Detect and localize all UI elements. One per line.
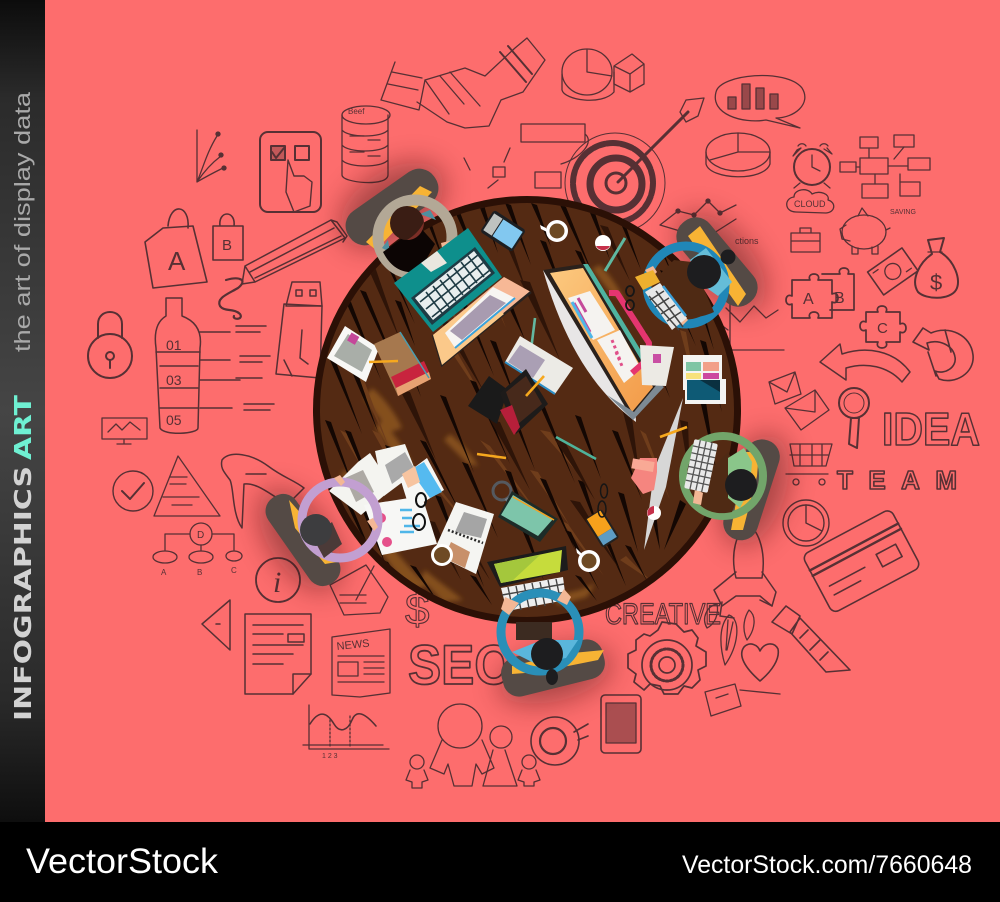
glasses right xyxy=(598,484,608,517)
spike base xyxy=(631,458,657,494)
laptop top left xyxy=(394,228,531,365)
keys xyxy=(415,251,491,320)
torso ring xyxy=(683,436,763,516)
keyboard top right xyxy=(635,270,687,330)
phone orange xyxy=(585,509,620,548)
torso ring xyxy=(647,246,725,324)
hair accent xyxy=(407,222,424,240)
icon: target and arrow xyxy=(565,98,704,233)
icon: gear xyxy=(628,622,706,694)
black tablet cluster xyxy=(468,369,548,435)
mug bottom right xyxy=(576,548,600,572)
paper under monitor xyxy=(640,345,674,386)
green pencil xyxy=(556,437,596,459)
magnifier xyxy=(493,482,517,516)
icon: org tree: D xyxy=(197,530,204,541)
ring interior xyxy=(652,260,714,318)
person: bottom left xyxy=(259,475,378,592)
pencil top xyxy=(605,238,625,271)
icon: shopping bags: A xyxy=(168,246,186,276)
icon: necktie xyxy=(772,606,850,672)
screen lid xyxy=(433,277,531,365)
icon: shopping cart xyxy=(786,444,832,485)
page two dots xyxy=(612,340,622,366)
head xyxy=(725,469,757,501)
person: bottom xyxy=(498,589,608,700)
notebook peach band xyxy=(396,372,431,396)
icon: info circle: i xyxy=(273,566,281,599)
icon: padlock xyxy=(88,312,132,378)
head xyxy=(300,514,332,546)
screen edge xyxy=(433,292,531,365)
icon: growth curves xyxy=(197,130,226,182)
black grain streaks xyxy=(325,203,722,605)
hands xyxy=(417,240,454,277)
icon: org tree: A xyxy=(161,568,167,577)
notebook red band xyxy=(391,361,429,388)
icon: puzzle pieces: C xyxy=(877,320,888,337)
coffee mug top xyxy=(540,220,568,242)
icon: puzzle pieces: B xyxy=(834,290,845,307)
phone screen xyxy=(493,219,523,249)
pencil right xyxy=(660,427,687,437)
chair xyxy=(669,210,765,314)
chair xyxy=(339,162,445,252)
keyboard right xyxy=(684,439,718,493)
light wood patches xyxy=(341,265,624,605)
green screen xyxy=(494,550,562,583)
hair tail xyxy=(546,669,558,685)
icon: alarm clock xyxy=(793,144,832,188)
seat cushion xyxy=(688,226,746,306)
icon: pencil scribble xyxy=(219,220,347,319)
chair xyxy=(498,636,608,700)
word: IDEA: IDEA xyxy=(882,403,980,455)
arms xyxy=(693,442,714,505)
pink cable xyxy=(609,293,649,373)
icon: line chart xyxy=(303,705,389,760)
open booklet center xyxy=(505,336,573,394)
icon: cycle arrow xyxy=(913,328,973,381)
chair xyxy=(719,435,784,545)
right monitor spike xyxy=(631,398,683,550)
monitor base xyxy=(607,383,664,420)
person: top right xyxy=(645,210,765,326)
chair xyxy=(259,488,347,592)
icon: wallet and pen xyxy=(705,684,780,716)
glasses bottom left xyxy=(413,493,426,530)
laptop bottom xyxy=(487,546,568,611)
icon: flow boxes xyxy=(464,124,588,188)
pie marker top xyxy=(595,235,611,251)
icon: pyramid xyxy=(154,456,220,516)
icon: puzzle pieces xyxy=(786,268,906,348)
monitor teal edge xyxy=(583,264,662,388)
page two xyxy=(597,330,641,383)
icon: rocket xyxy=(714,524,776,618)
icon: cloud: CLOUD xyxy=(794,199,826,209)
icon: org tree: C xyxy=(231,566,237,575)
icon: tablet sketch xyxy=(601,695,641,753)
shirt xyxy=(312,522,342,558)
color swatch page xyxy=(683,355,722,390)
pie marker right xyxy=(647,506,661,520)
seat cushion xyxy=(731,452,759,530)
keypad xyxy=(635,270,660,290)
page one blue bar xyxy=(572,302,592,338)
medium wood streaks xyxy=(340,286,690,578)
torso ring xyxy=(302,482,378,558)
icon: touch tablet xyxy=(260,132,321,212)
icon: cloud xyxy=(787,190,834,213)
icon: flow chart cluster xyxy=(840,135,930,198)
screen page xyxy=(445,287,515,348)
icon: magnifier xyxy=(839,388,869,448)
hands xyxy=(645,266,688,326)
notebook bottom spiral xyxy=(433,502,494,574)
icon: document xyxy=(245,614,311,694)
left page xyxy=(327,326,379,382)
icon: money bag: $ xyxy=(930,270,942,295)
icon: pie chart right xyxy=(706,133,770,177)
icon: handshake xyxy=(381,38,545,128)
icon: speech bubble with bars xyxy=(715,76,805,128)
icon: line chart: 1 2 3 xyxy=(322,753,338,760)
icon: newspaper xyxy=(332,629,390,697)
sidebar accent word: ART xyxy=(11,395,37,460)
icon: presentation board xyxy=(102,418,147,444)
icon: coffee cup xyxy=(531,717,588,765)
icon: 3D pie chart xyxy=(562,49,644,100)
icon: family xyxy=(406,704,540,788)
icon: bottle: 01 xyxy=(166,337,182,353)
laptop base xyxy=(394,228,502,332)
word: SEO: SEO xyxy=(408,633,513,696)
keyboard xyxy=(411,247,495,325)
icon: triangle play xyxy=(202,600,230,650)
icon: credit card xyxy=(802,509,921,614)
icon: check badge xyxy=(113,471,153,511)
icon: dollar sign: $ xyxy=(405,585,429,634)
icon: piggy bank xyxy=(840,208,916,254)
laptop keyboard xyxy=(501,577,566,611)
head xyxy=(687,255,721,289)
icon: bottle: 03 xyxy=(166,372,182,388)
monitor screen xyxy=(550,268,653,412)
notebook left xyxy=(369,332,431,396)
pen top table xyxy=(531,318,535,350)
phone top xyxy=(480,210,526,252)
teal tablet xyxy=(498,491,558,542)
icon: shopping bags: B xyxy=(222,237,232,254)
icon: line graph right: ctions xyxy=(735,236,759,246)
icon: info circle xyxy=(256,558,300,602)
icon: bottle: 05 xyxy=(166,412,182,428)
icon: zigzag chart xyxy=(720,300,784,350)
icon: banknote xyxy=(868,248,918,295)
icon: org tree: B xyxy=(197,568,202,577)
icon: piggy bank: SAVING xyxy=(890,209,916,216)
hair bun xyxy=(720,250,736,264)
icon: envelopes xyxy=(769,372,829,430)
word: TEAM: TEAM xyxy=(837,465,957,495)
watermark url: VectorStock.com/7660648 xyxy=(682,851,972,879)
seat cushion xyxy=(289,500,337,564)
paper under hand xyxy=(421,251,447,272)
icon: high heel xyxy=(221,454,304,528)
icon: org tree xyxy=(153,523,242,577)
hands xyxy=(501,589,571,615)
sidebar xyxy=(0,0,45,822)
icon: USB stick xyxy=(276,282,322,378)
icon: briefcase xyxy=(791,228,820,252)
icon: shopping bags xyxy=(145,209,243,288)
icon: stopwatch pie xyxy=(783,500,829,546)
word: CREATIVE: CREATIVE xyxy=(605,598,721,631)
sweater xyxy=(690,248,732,296)
head xyxy=(531,638,563,670)
bottom black band xyxy=(0,822,1000,902)
icon: curved arrow xyxy=(820,344,910,382)
person: top left with laptop xyxy=(339,162,454,277)
ring interior xyxy=(690,452,744,513)
icon: stacked data drums xyxy=(342,106,390,183)
seat shadows xyxy=(242,145,801,714)
phone right xyxy=(685,379,726,404)
monitor frame xyxy=(543,264,664,420)
sidebar tagline: the art of display data xyxy=(10,91,35,352)
torso ring xyxy=(501,593,579,671)
icon: drops and lightning xyxy=(705,604,754,665)
interior shade xyxy=(383,226,435,272)
round wooden table xyxy=(313,196,741,624)
pencils table xyxy=(477,437,596,459)
central monitor xyxy=(543,264,664,422)
icon: puzzle pieces: A xyxy=(803,291,814,308)
shirt xyxy=(512,640,578,664)
page one xyxy=(568,291,615,340)
icon: heart xyxy=(742,644,778,681)
hand xyxy=(334,475,378,531)
wood grain xyxy=(325,203,722,605)
icon: paper and pencil xyxy=(330,565,388,615)
icon: bottle xyxy=(155,298,274,433)
glasses top xyxy=(626,286,634,310)
icon: line graph right xyxy=(660,199,759,246)
interior xyxy=(516,622,552,640)
collar detail xyxy=(382,210,436,252)
dark wood streaks xyxy=(350,225,690,580)
icon: newspaper: NEWS xyxy=(336,638,370,653)
doodle icons ring xyxy=(88,38,980,788)
page one chart xyxy=(574,298,590,332)
torso ring xyxy=(378,200,452,274)
coffee mug bottom left xyxy=(431,544,453,566)
papers bottom left xyxy=(329,444,444,555)
screen chart xyxy=(450,295,506,340)
head xyxy=(390,206,424,240)
icon: stacked data drums: Beef xyxy=(348,107,365,116)
person: right xyxy=(683,435,784,545)
shirt xyxy=(728,448,752,508)
sidebar title: INFOGRAPHICS xyxy=(11,466,37,721)
watermark brand: VectorStock xyxy=(26,842,219,881)
monitor stand xyxy=(543,270,636,422)
icon: money bag xyxy=(915,238,958,298)
seat cushion xyxy=(512,650,604,674)
phone keyboard xyxy=(483,213,503,236)
keyboard accent xyxy=(663,286,686,316)
seat cushion xyxy=(366,186,432,250)
